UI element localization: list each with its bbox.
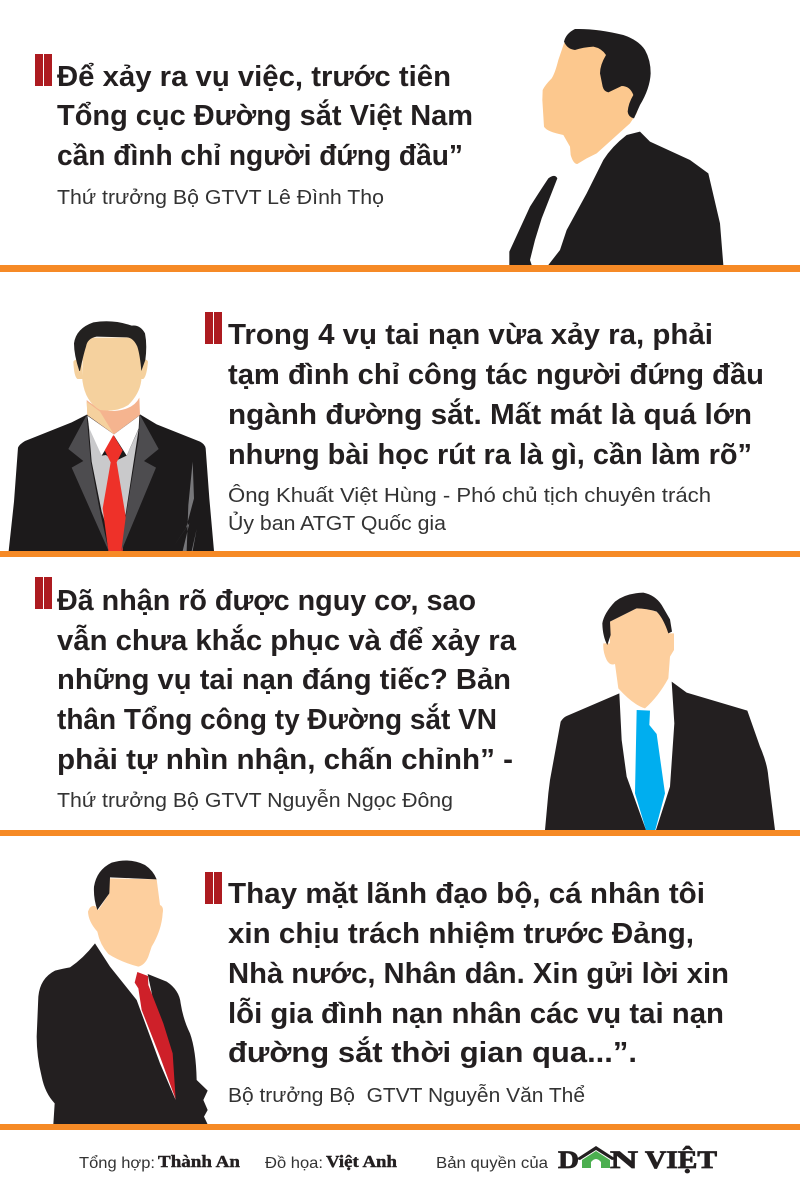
icon: red quote mark 3 <box>35 577 52 609</box>
panel: quote 3 <box>35 577 775 830</box>
text: copyright: Bản quyền của <box>436 1155 548 1172</box>
heading: quote 3 text: vẫn chưa khắc phục và để xảy ra <box>57 623 517 657</box>
panel: quote 4 <box>37 860 729 1124</box>
icon: red quote mark 2 <box>205 312 222 344</box>
heading: quote 3 text: Đã nhận rõ được nguy cơ, sao <box>57 585 476 617</box>
divider bar 3 <box>0 830 800 836</box>
logo: Dân Việt <box>558 1146 717 1174</box>
icon: red quote mark 1 <box>35 54 52 86</box>
heading: quote 4 text: xin chịu trách nhiệm trước Đảng, <box>228 918 694 950</box>
text: designer name: Việt Anh <box>326 1152 398 1171</box>
icon: man in profile looking up <box>509 29 723 265</box>
heading: quote 4 text: Thay mặt lãnh đạo bộ, cá nhân tôi <box>228 878 705 910</box>
logo: Dân Việt: N <box>610 1147 638 1174</box>
heading: quote 3 text: những vụ tai nạn đáng tiếc? Bản <box>57 664 511 696</box>
text: compiler name: Thành An <box>158 1152 241 1171</box>
logo: Dân Việt: D <box>558 1147 579 1174</box>
text: quote 3 attribution: Thứ trưởng Bộ GTVT Nguyễn Ngọc Đông <box>57 789 453 812</box>
divider bar 4 <box>0 1124 800 1130</box>
heading: quote 2 text <box>228 319 764 471</box>
icon: man with red tie, three-quarter view <box>37 860 208 1124</box>
text: quote 1 attribution: Thứ trưởng Bộ GTVT Lê Đình Thọ <box>57 187 384 209</box>
heading: quote 1 text: Tổng cục Đường sắt Việt Nam <box>57 98 473 132</box>
heading: quote 2 text: ngành đường sắt. Mất mát là quá lớn <box>228 397 752 431</box>
heading: quote 1 text: cần đình chỉ người đứng đầu” <box>57 140 463 172</box>
heading: quote 4 text: Nhà nước, Nhân dân. Xin gửi lời xin <box>228 958 729 990</box>
heading: quote 3 text: thân Tổng công ty Đường sắt VN <box>57 702 497 736</box>
heading: quote 4 text: lỗi gia đình nạn nhân các vụ tai nạn <box>228 996 724 1030</box>
text: quote 2 attribution: Ông Khuất Việt Hùng - Phó chủ tịch chuyên trách <box>228 484 711 507</box>
heading: quote 2 text: Trong 4 vụ tai nạn vừa xảy ra, phải <box>228 319 713 351</box>
logo: Dân Việt: VIỆT <box>645 1146 717 1174</box>
icon: man with blue tie <box>545 593 775 830</box>
heading: quote 1 text: Để xảy ra vụ việc, trước tiên <box>57 61 451 93</box>
divider bar 1 <box>0 265 800 272</box>
heading: quote 1 text <box>57 61 473 172</box>
divider bar 2 <box>0 551 800 557</box>
heading: quote 2 text: nhưng bài học rút ra là gì, cần làm rõ” <box>228 439 752 471</box>
heading: quote 4 text <box>228 878 729 1069</box>
text: quote 2 attribution <box>228 484 711 535</box>
heading: quote 3 text: phải tự nhìn nhận, chấn chỉnh” - <box>57 744 513 776</box>
heading: quote 4 text: đường sắt thời gian qua...”. <box>228 1035 637 1069</box>
text: graphics by: Đồ họa: <box>265 1155 323 1172</box>
heading: quote 2 text: tạm đình chỉ công tác người đứng đầu <box>228 359 764 391</box>
footer credits <box>79 1146 717 1174</box>
text: quote 2 attribution: Ủy ban ATGT Quốc gia <box>228 511 447 535</box>
icon: red quote mark 4 <box>205 872 222 904</box>
panel: quote 2 <box>9 312 764 551</box>
heading: quote 3 text <box>57 585 517 776</box>
text: compiled by: Tổng hợp: <box>79 1154 155 1172</box>
panel: quote 1 <box>35 29 723 265</box>
icon: man with red tie and grey lapels <box>9 321 214 551</box>
text: quote 4 attribution: Bộ trưởng Bộ GTVT Nguyễn Văn Thể <box>228 1084 585 1107</box>
